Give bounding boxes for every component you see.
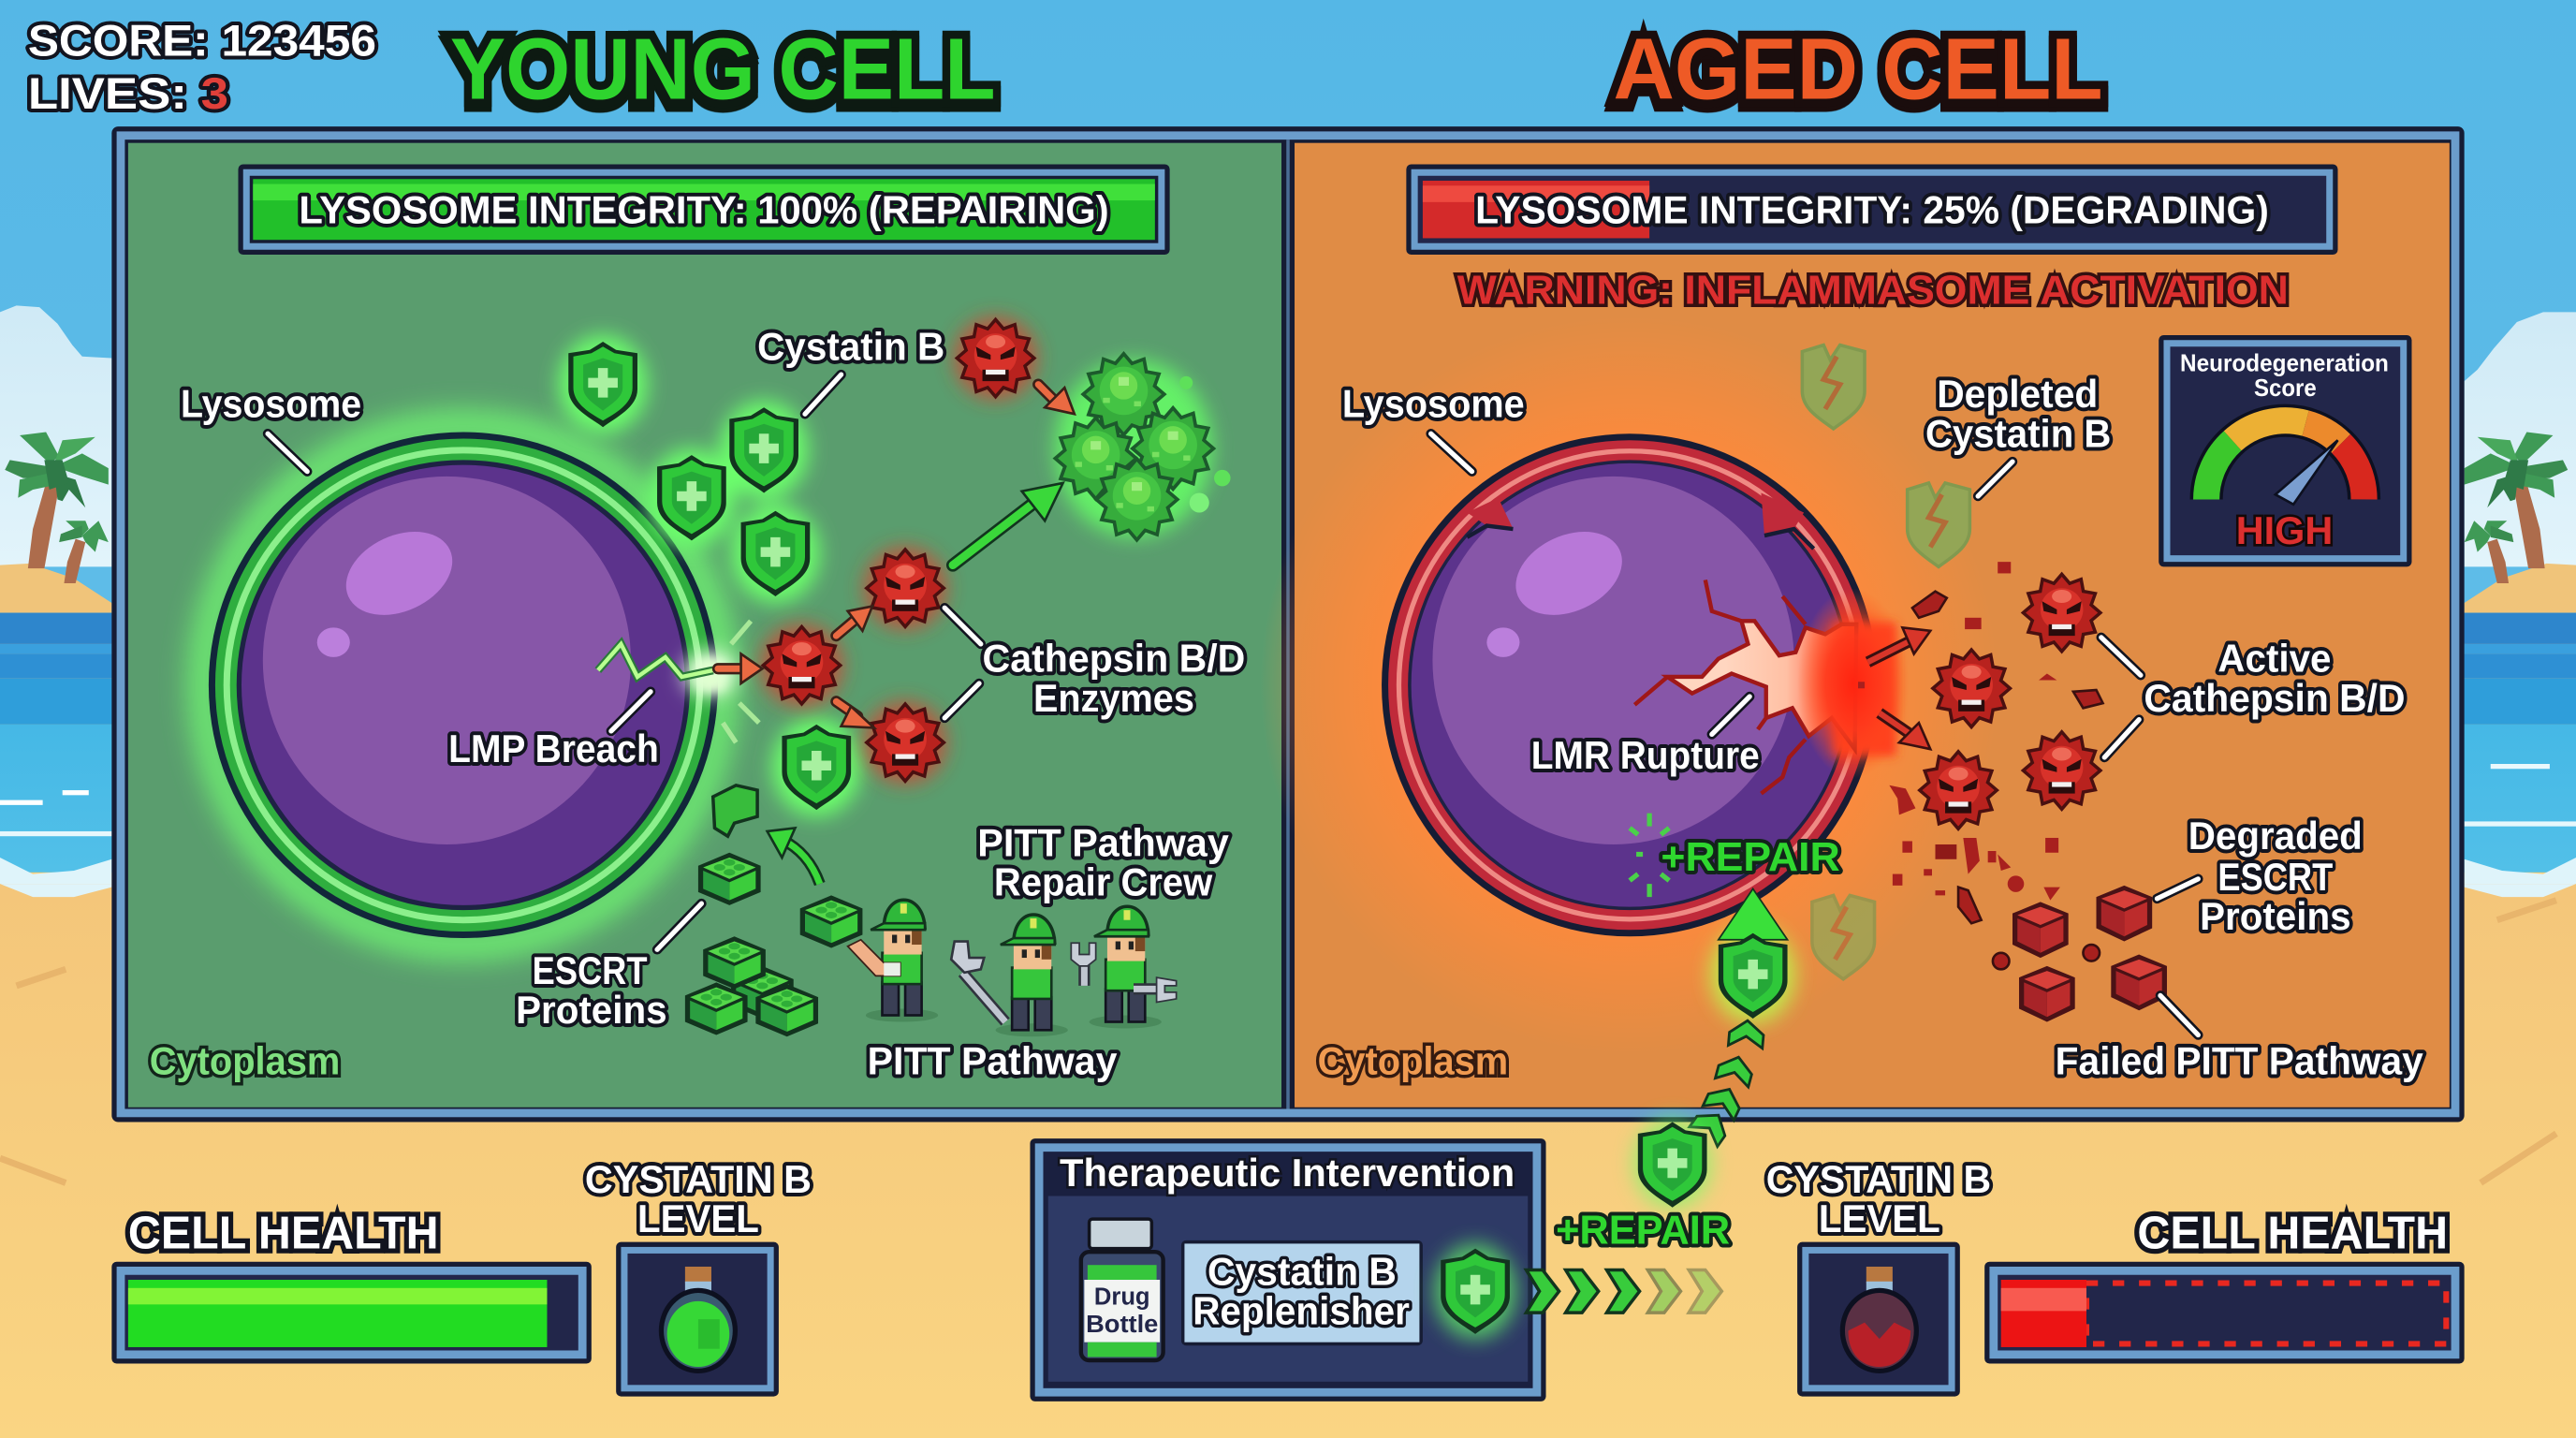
cathepsin enzymes — [761, 317, 1036, 784]
label: Depleted Cystatin B: Depleted — [1937, 372, 2098, 416]
left cell health bar: CELL HEALTH — [128, 1209, 439, 1259]
right cell health bar — [1984, 1209, 2465, 1364]
label: PITT repair crew: Repair Crew — [994, 859, 1212, 903]
label: Cystatin B — [757, 324, 944, 414]
icon: drug bottle: Drug — [1094, 1282, 1150, 1310]
right cell health bar: CELL HEALTH — [2137, 1209, 2448, 1259]
label: Cytoplasm: Cytoplasm — [150, 1039, 340, 1083]
label: LMP Breach — [448, 692, 659, 770]
right cystatin level — [1766, 1157, 1991, 1397]
degraded debris — [1858, 562, 2103, 969]
left cell health bar — [111, 1209, 592, 1364]
label: Failed PITT — [2056, 995, 2423, 1083]
panel: aged cell — [1260, 143, 2450, 1108]
replenisher card — [1181, 1240, 1423, 1345]
label: Depleted Cystatin B — [1925, 372, 2111, 496]
+repair label: +REPAIR — [1556, 1207, 1730, 1253]
label: ESCRT Proteins — [516, 903, 701, 1032]
degraded ESCRT blocks — [2012, 886, 2167, 1022]
label: Degraded ESCRT: Degraded — [2188, 814, 2363, 858]
label: Lysosome: Lysosome — [1342, 382, 1525, 426]
lives text: LIVES: 3 — [28, 69, 228, 119]
icon: shield — [1434, 1243, 1516, 1339]
label: Cathepsin — [944, 608, 1245, 720]
depleted cystatin shields — [1802, 345, 1969, 979]
label: ESCRT Proteins: ESCRT — [533, 948, 648, 992]
repair burst text — [1630, 814, 1840, 897]
label: Depleted Cystatin B: Cystatin B — [1925, 411, 2111, 455]
gauge: neurodegeneration score: HIGH — [2236, 508, 2333, 552]
gauge: neurodegeneration score: Neurodegeneration — [2180, 351, 2389, 377]
panel heading: Therapeutic Intervention — [1060, 1151, 1515, 1195]
cystatin B shields — [559, 335, 861, 816]
replenisher card: Replenisher — [1193, 1288, 1410, 1332]
rupture explosion — [1634, 580, 1909, 794]
icon: green potion — [659, 1267, 738, 1373]
label: PITT Pathway: PITT Pathway — [868, 1039, 1118, 1083]
label: ESCRT Proteins: Proteins — [516, 988, 667, 1032]
label: PITT repair crew: PITT Pathway — [977, 820, 1229, 864]
label: Cathepsin: Enzymes — [1033, 676, 1194, 720]
left cystatin level: CYSTATIN B — [585, 1157, 812, 1201]
label: Degraded ESCRT: ESCRT — [2217, 855, 2333, 899]
label: Active Cathepsin — [2101, 637, 2405, 757]
label: Lysosome — [1342, 382, 1525, 472]
integrity text: LYSOSOME INTEGRITY: 25% (DEGRADING) — [1475, 188, 2269, 232]
lysosome: healthy — [204, 426, 723, 945]
arrows: escaping enzymes — [1868, 627, 1930, 749]
repair burst text: +REPAIR — [1661, 834, 1840, 880]
label: PITT repair crew — [977, 820, 1229, 903]
lysosome: ruptured — [1382, 433, 1878, 936]
neutralised enzyme cluster — [1055, 354, 1231, 540]
label: Cytoplasm: Cytoplasm — [1318, 1039, 1508, 1083]
repair arrow — [768, 828, 820, 884]
left cystatin level — [585, 1157, 812, 1397]
gauge: neurodegeneration score — [2159, 335, 2411, 566]
LMP breach spark — [598, 621, 759, 742]
panel: young cell — [128, 143, 1281, 1108]
icon: drug bottle: Bottle — [1086, 1310, 1158, 1338]
label: Degraded ESCRT — [2157, 814, 2363, 938]
label: Active Cathepsin: Active — [2217, 637, 2331, 681]
label: Cathepsin: Cathepsin B/D — [983, 637, 1245, 681]
title: aged cell: AGED CELL — [1614, 20, 2103, 117]
chevrons to aged cell — [1526, 1269, 1721, 1313]
label: Cystatin B: Cystatin B — [757, 324, 944, 368]
label: Lysosome: Lysosome — [181, 382, 361, 426]
label: Failed PITT: Failed PITT Pathway — [2056, 1039, 2423, 1083]
integrity bar: young — [238, 164, 1170, 255]
right cystatin level: LEVEL — [1819, 1196, 1940, 1240]
integrity text: LYSOSOME INTEGRITY: 100% (REPAIRING) — [299, 188, 1109, 232]
right cystatin level: CYSTATIN B — [1766, 1157, 1991, 1201]
repair crew workers — [848, 900, 1177, 1036]
main frame — [111, 126, 2465, 1123]
label: LMP Breach: LMP Breach — [448, 726, 659, 770]
therapeutic repair path — [1633, 888, 1795, 1210]
active cathepsin enzymes — [1920, 574, 2100, 829]
warning text: WARNING: INFLAMMASOME ACTIVATION — [1457, 268, 2289, 314]
label: Degraded ESCRT: Proteins — [2200, 894, 2351, 938]
integrity bar: aged — [1406, 164, 2338, 255]
therapeutic intervention panel — [1030, 1138, 1546, 1401]
arrows: enzyme flow — [718, 385, 1075, 727]
score counter — [28, 17, 376, 119]
gauge: neurodegeneration score: Score — [2254, 375, 2317, 402]
label: Active Cathepsin: Cathepsin B/D — [2144, 676, 2405, 720]
score text: SCORE: 123456 — [28, 17, 376, 66]
icon: red potion — [1840, 1267, 1919, 1373]
replenisher card: Cystatin B — [1208, 1249, 1397, 1293]
ESCRT protein blocks — [685, 785, 862, 1036]
title: young cell: YOUNG CELL — [450, 20, 996, 117]
label: LMR Rupture: LMR Rupture — [1531, 733, 1760, 777]
icon: drug bottle — [1081, 1219, 1164, 1360]
label: LMR Rupture — [1531, 697, 1760, 777]
left cystatin level: LEVEL — [637, 1196, 759, 1240]
label: Lysosome — [181, 382, 361, 472]
